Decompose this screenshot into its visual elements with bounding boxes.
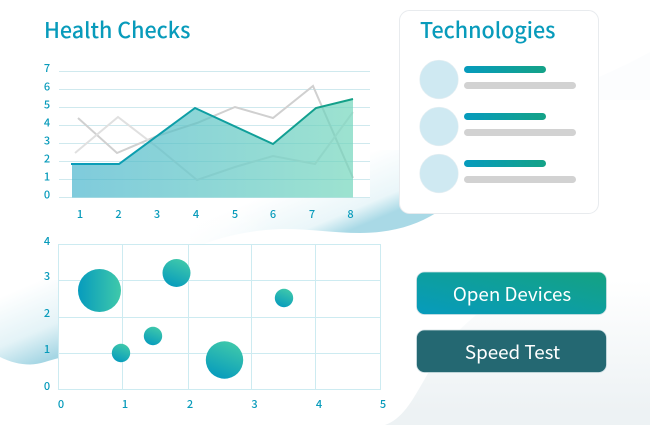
y axis labels: 4 <box>44 233 50 249</box>
x axis labels: 3 <box>251 396 258 412</box>
x axis labels: 5 <box>232 206 238 222</box>
y axis labels: 0 <box>44 378 50 394</box>
x axis labels: 1 <box>77 206 83 222</box>
y axis labels: 6 <box>44 78 50 94</box>
list item 3 <box>420 154 576 193</box>
bubbles <box>78 269 121 312</box>
x axis labels: 3 <box>154 206 160 222</box>
x axis labels: 2 <box>115 206 122 222</box>
y axis labels: 0 <box>44 186 50 202</box>
heading: Technologies <box>420 14 555 45</box>
title: Health Checks: Health Checks <box>44 14 190 45</box>
background wave: middle band <box>190 150 500 250</box>
x axis labels: 8 <box>347 206 354 222</box>
x axis labels <box>58 396 386 412</box>
chart background <box>58 244 380 390</box>
y axis labels: 2 <box>44 150 50 166</box>
x axis labels <box>77 206 354 222</box>
y axis labels: 4 <box>44 114 50 130</box>
y axis labels: 1 <box>44 341 50 357</box>
x axis labels: 5 <box>380 396 386 412</box>
x axis labels: 6 <box>270 206 276 222</box>
gray series A <box>78 86 353 178</box>
gray series B <box>75 112 353 180</box>
gridlines <box>59 72 370 198</box>
area fill <box>72 99 353 198</box>
main line <box>71 99 353 164</box>
x axis labels: 4 <box>193 206 199 222</box>
y axis labels: 5 <box>44 96 50 112</box>
x axis labels: 4 <box>316 396 322 412</box>
x axis labels: 1 <box>122 396 128 412</box>
button: Speed Test: Speed Test <box>465 338 560 365</box>
chart panel backing <box>58 60 370 198</box>
grid <box>58 244 380 390</box>
area chart <box>44 60 370 222</box>
card <box>400 10 598 214</box>
y axis labels <box>44 60 50 202</box>
x axis labels: 7 <box>309 206 315 222</box>
button: Open Devices: Open Devices <box>453 280 571 307</box>
button: Open Devices <box>416 272 606 314</box>
y axis labels: 7 <box>44 60 50 76</box>
y axis labels: 3 <box>44 268 50 284</box>
background wave: left <box>0 280 59 364</box>
y axis labels <box>44 233 50 394</box>
y axis labels: 1 <box>44 168 50 184</box>
background wave: lower-right <box>385 278 650 425</box>
x axis labels: 0 <box>58 396 64 412</box>
panel: Technologies <box>400 10 598 214</box>
x axis labels: 2 <box>187 396 193 412</box>
list item 1 <box>420 60 576 99</box>
background wave: faint top right <box>599 52 650 100</box>
y axis labels: 2 <box>44 305 50 321</box>
list item 2 <box>420 107 576 146</box>
y axis labels: 3 <box>44 132 50 148</box>
button: Speed Test <box>416 330 606 372</box>
bubble chart <box>44 233 386 412</box>
